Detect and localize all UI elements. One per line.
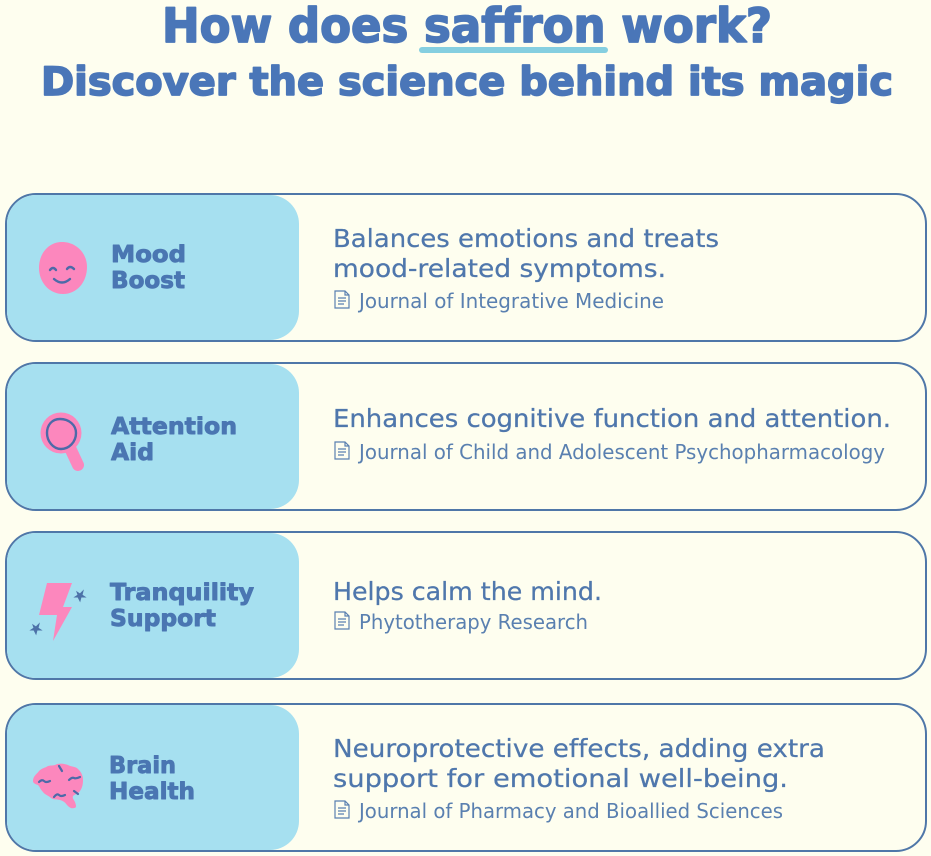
label: Support [110, 606, 216, 632]
icon: brain [33, 764, 83, 808]
label: Health [109, 779, 195, 805]
description [333, 224, 719, 283]
title: How does saffron work? [162, 0, 772, 54]
description: mood-related symptoms. [333, 254, 666, 283]
description: Neuroprotective effects, adding extra [333, 734, 825, 763]
description: Balances emotions and treats [333, 224, 719, 253]
source: Journal of Child and Adolescent Psychopharmacology [357, 440, 885, 464]
source: Phytotherapy Research [359, 610, 588, 634]
panel: mood boost [6, 194, 926, 341]
label [111, 242, 186, 294]
description: Enhances cognitive function and attention. [333, 404, 891, 433]
label: Boost [111, 268, 185, 294]
icon: smiling face [39, 242, 87, 294]
panel: attention aid [6, 363, 926, 510]
icon: magnifying glass [40, 412, 82, 465]
source: Journal of Pharmacy and Bioallied Sciences [357, 799, 783, 823]
title [41, 0, 893, 105]
description: support for emotional well-being. [333, 764, 788, 793]
icon: lightning bolt [31, 583, 85, 641]
label: Brain [109, 753, 176, 779]
label: Attention [111, 414, 237, 440]
description [333, 734, 825, 793]
label: Mood [111, 242, 186, 268]
label [109, 753, 195, 805]
title: Discover the science behind its magic [41, 60, 893, 105]
label: Aid [111, 440, 154, 466]
label: Tranquility [110, 580, 254, 606]
label [110, 580, 254, 632]
description: Helps calm the mind. [333, 577, 602, 606]
panel: brain health [6, 704, 926, 851]
panel: tranquility support [6, 532, 926, 679]
label [111, 414, 237, 466]
source: Journal of Integrative Medicine [357, 289, 664, 313]
